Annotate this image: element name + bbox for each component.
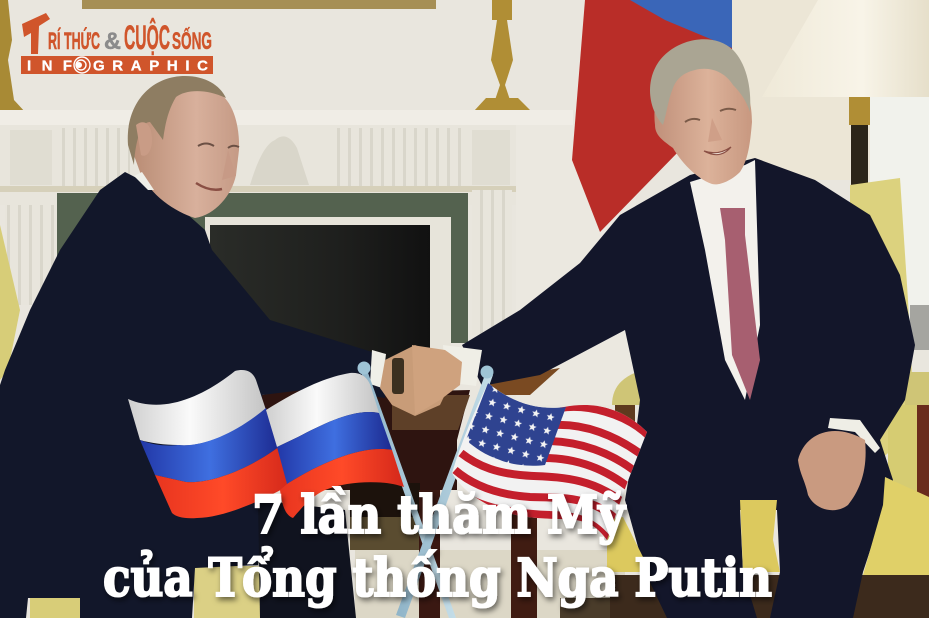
flag of the USA <box>452 383 647 540</box>
yellow seat cushion <box>607 477 929 575</box>
left fold <box>128 370 291 518</box>
curtains and window <box>730 0 929 350</box>
left man: shirt cuff and hand <box>370 345 452 416</box>
flag of Russia <box>128 370 404 518</box>
right man: nose <box>708 118 722 142</box>
logo wordmark <box>48 18 212 57</box>
chair left and floor <box>0 225 929 618</box>
flag poles <box>358 362 494 618</box>
title <box>103 485 772 609</box>
left man: suit <box>0 172 385 618</box>
left man: ear <box>136 122 152 156</box>
left man: mouth <box>196 183 222 190</box>
side table <box>262 368 560 618</box>
right man: cuffs and hands <box>412 345 880 510</box>
gold picture frame <box>82 0 436 9</box>
logo banner <box>21 56 213 74</box>
right man: mouth <box>704 147 731 155</box>
logo wordmark: SỐNG <box>172 27 212 55</box>
candlestick centre <box>474 0 531 111</box>
logo icon: T <box>22 13 50 54</box>
logo swirl O <box>74 57 90 73</box>
right man: head <box>650 39 752 184</box>
flag behind: red and blue <box>572 0 732 232</box>
wall panel right of fireplace <box>516 125 636 405</box>
left man: eyes <box>198 144 239 148</box>
candlestick left <box>0 0 26 113</box>
logo banner text: INF <box>27 58 72 74</box>
logo wordmark: RÍ THỨC <box>48 27 100 55</box>
logo banner text: GRAPHIC <box>93 58 208 74</box>
right man: shirt and tie <box>690 160 760 400</box>
left man: nose shadow <box>222 150 236 180</box>
canton with stars <box>466 383 566 466</box>
logo <box>21 13 213 74</box>
left man: shirt collar <box>134 172 154 190</box>
logo wordmark: CUỘC <box>124 18 170 57</box>
marble surround <box>57 193 468 343</box>
right man: eyes <box>685 109 736 122</box>
left man: head <box>128 76 239 218</box>
left man: lower leg <box>258 500 356 618</box>
yellow armchair back and arms <box>612 178 929 500</box>
title: của Tổng thống Nga Putin <box>103 547 772 609</box>
fireplace mantel <box>0 110 573 335</box>
fireplace opening <box>205 217 451 360</box>
right man: suit <box>462 158 915 618</box>
logo banner text <box>27 58 208 74</box>
lamp <box>762 0 929 185</box>
right fold <box>266 373 404 518</box>
logo wordmark: & <box>104 28 121 55</box>
left man: hair <box>128 76 226 165</box>
right man: hair <box>650 39 750 125</box>
title: 7 lần thăm Mỹ <box>252 485 627 546</box>
